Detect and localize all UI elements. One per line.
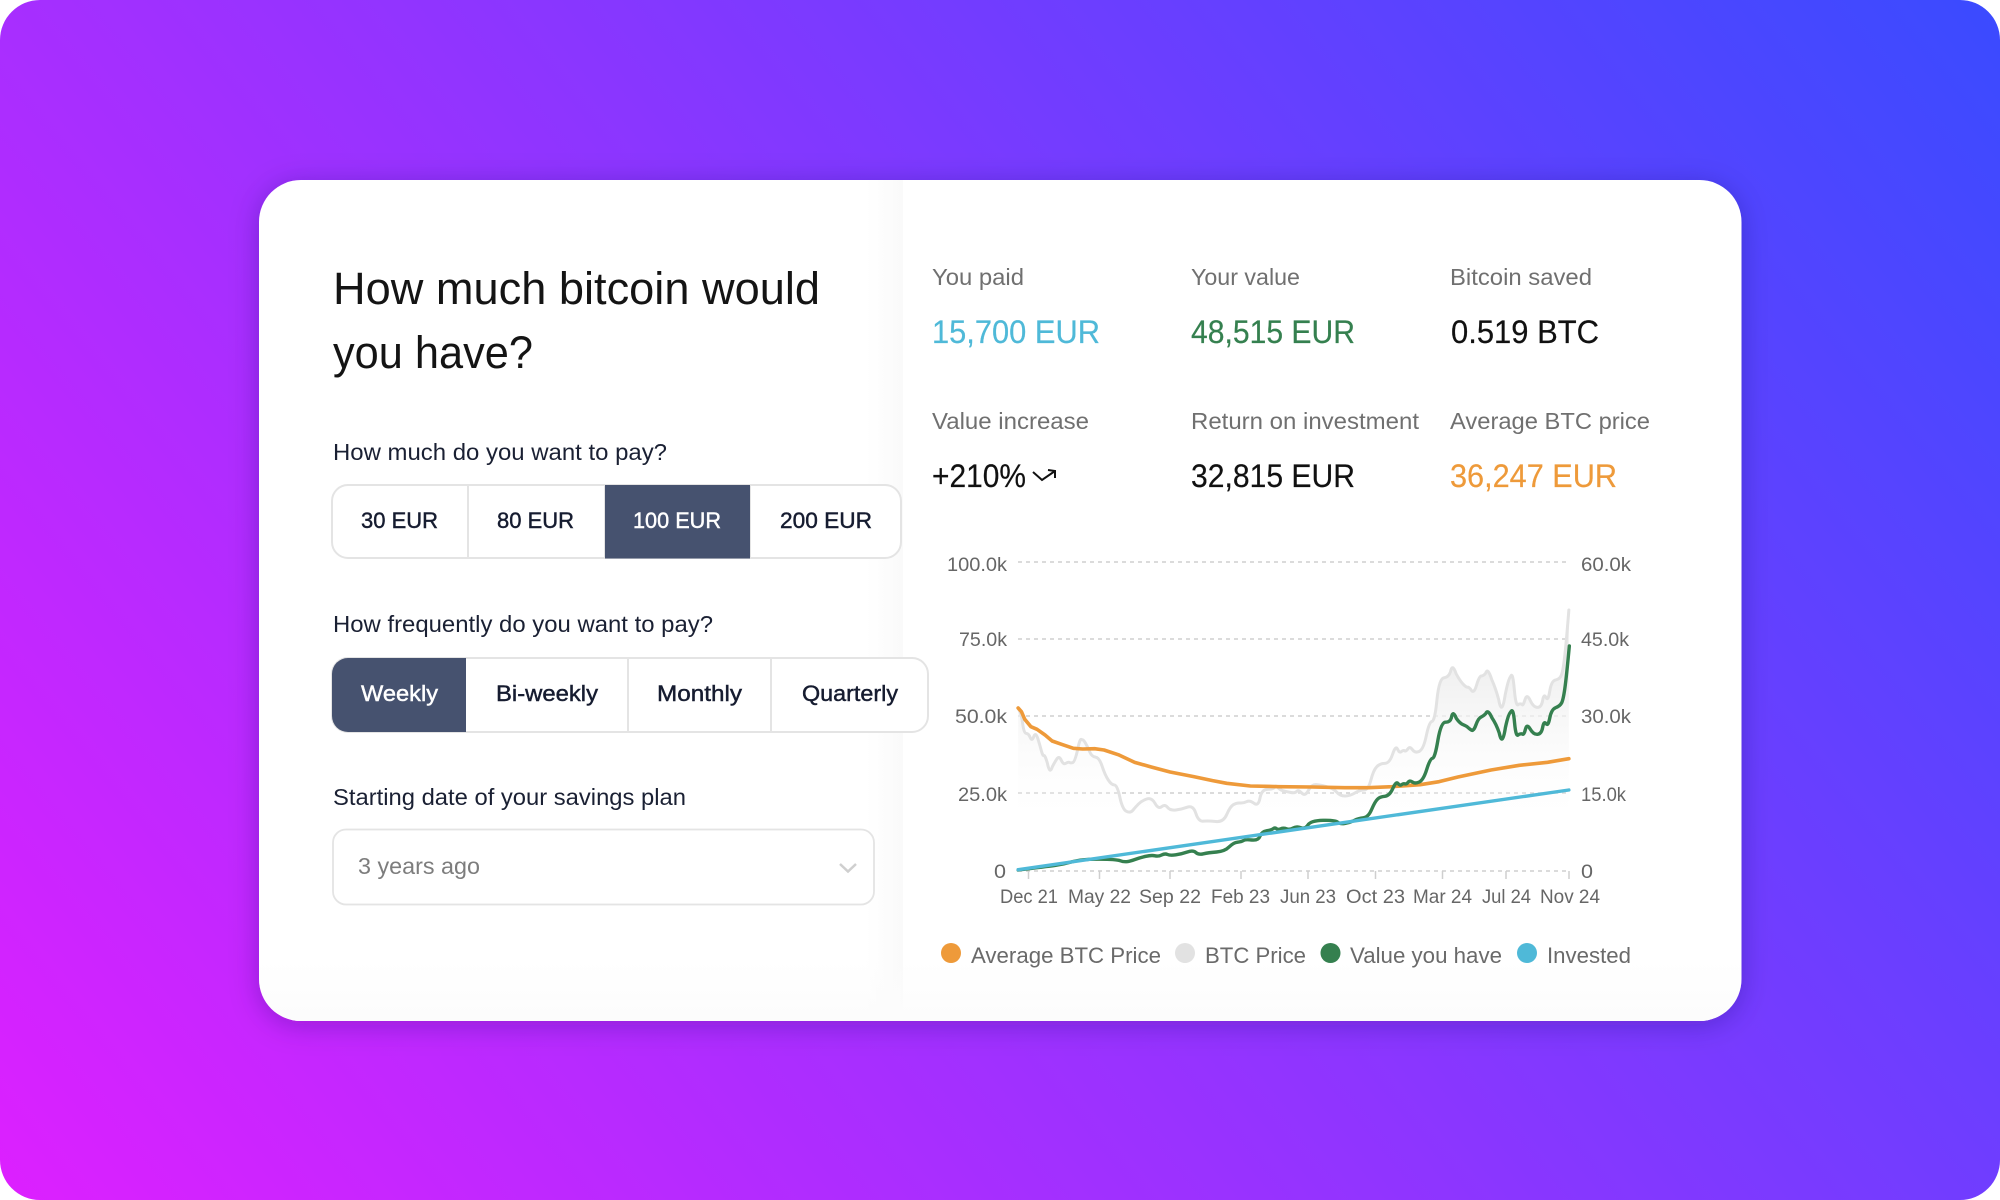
stat: value increase: +210% — [932, 458, 1026, 494]
x axis labels: Sep 22 — [1139, 886, 1201, 908]
right axis labels: 30.0k — [1581, 706, 1631, 728]
series: average BTC price — [1018, 708, 1569, 788]
stat: value increase: Value increase — [932, 408, 1089, 434]
line chart — [947, 554, 1631, 908]
x axis labels: May 22 — [1068, 886, 1131, 908]
x axis labels: Mar 24 — [1413, 886, 1472, 908]
button group: amounts — [332, 485, 901, 558]
left axis labels: 25.0k — [958, 784, 1007, 806]
series: invested — [1018, 790, 1569, 870]
button group: frequency: Monthly — [657, 681, 743, 706]
right axis labels: 60.0k — [1581, 554, 1631, 576]
right axis labels: 45.0k — [1581, 629, 1629, 651]
left axis labels: 0 — [994, 861, 1006, 883]
panel: starting date — [333, 784, 874, 904]
stat: you paid — [932, 264, 1100, 350]
x axis labels: Feb 23 — [1211, 886, 1270, 908]
panel: payment frequency — [332, 611, 928, 732]
legend item: invested: Invested — [1547, 943, 1631, 968]
button group: frequency: Bi-weekly — [496, 681, 599, 706]
stat: bitcoin saved: 0.519 BTC — [1451, 314, 1599, 350]
left axis labels: 75.0k — [959, 629, 1007, 651]
panel: statistics — [932, 264, 1650, 494]
left axis labels — [947, 554, 1007, 883]
x axis labels: Jun 23 — [1280, 886, 1336, 908]
button group: amounts: 80 EUR — [497, 508, 574, 533]
stat: your value: Your value — [1191, 264, 1300, 290]
x axis labels: Nov 24 — [1540, 886, 1600, 908]
right axis labels — [1581, 554, 1631, 883]
stat: you paid: You paid — [932, 264, 1024, 290]
stat: return on investment — [1191, 408, 1420, 494]
x axis labels: Dec 21 — [1000, 886, 1058, 908]
series: BTC price — [1018, 610, 1569, 871]
stat: bitcoin saved: Bitcoin saved — [1450, 264, 1592, 290]
stat: return on investment: 32,815 EUR — [1191, 458, 1355, 494]
legend item: average BTC price: Average BTC Price — [971, 943, 1161, 968]
left axis labels: 50.0k — [955, 706, 1007, 728]
stat: average BTC price: Average BTC price — [1450, 408, 1650, 434]
button group: frequency: Weekly — [361, 681, 439, 706]
title — [333, 263, 820, 378]
stat: your value: 48,515 EUR — [1191, 314, 1355, 350]
dropdown — [333, 830, 874, 904]
button group: amounts: 30 EUR — [361, 508, 438, 533]
stat: bitcoin saved — [1450, 264, 1599, 350]
legend item: value you have: Value you have — [1350, 943, 1502, 968]
panel: calculator card — [259, 180, 1742, 1021]
chart series — [1018, 610, 1569, 871]
stat: average BTC price: 36,247 EUR — [1450, 458, 1617, 494]
stat: average BTC price — [1450, 408, 1650, 494]
x axis labels: Oct 23 — [1346, 886, 1405, 908]
stat: value increase — [932, 408, 1089, 494]
label: starting date: Starting date of your savings plan — [333, 784, 686, 810]
stat: you paid: 15,700 EUR — [932, 314, 1100, 350]
x axis labels — [1000, 886, 1600, 908]
dropdown: 3 years ago — [358, 853, 480, 879]
stat: your value — [1191, 264, 1355, 350]
legend — [941, 943, 1631, 968]
button group: frequency: Quarterly — [802, 681, 899, 706]
left axis labels: 100.0k — [947, 554, 1007, 576]
button group: amounts: 100 EUR — [633, 508, 721, 533]
series: value you have — [1018, 646, 1569, 870]
label: frequency question: How frequently do you want to pay? — [333, 611, 713, 637]
legend item: BTC price: BTC Price — [1205, 943, 1306, 968]
title: you have? — [333, 327, 533, 378]
stat: return on investment: Return on investment — [1191, 408, 1420, 434]
x axis labels: Jul 24 — [1482, 886, 1531, 908]
label: payment amount question: How much do you want to pay? — [333, 439, 667, 465]
icon: trend arrow — [1033, 470, 1055, 480]
title: How much bitcoin would — [333, 263, 820, 314]
button group: amounts: 200 EUR — [780, 508, 872, 533]
panel: payment amount — [332, 439, 901, 558]
button group: frequency — [332, 658, 928, 732]
right axis labels: 15.0k — [1581, 784, 1626, 806]
right axis labels: 0 — [1581, 861, 1593, 883]
